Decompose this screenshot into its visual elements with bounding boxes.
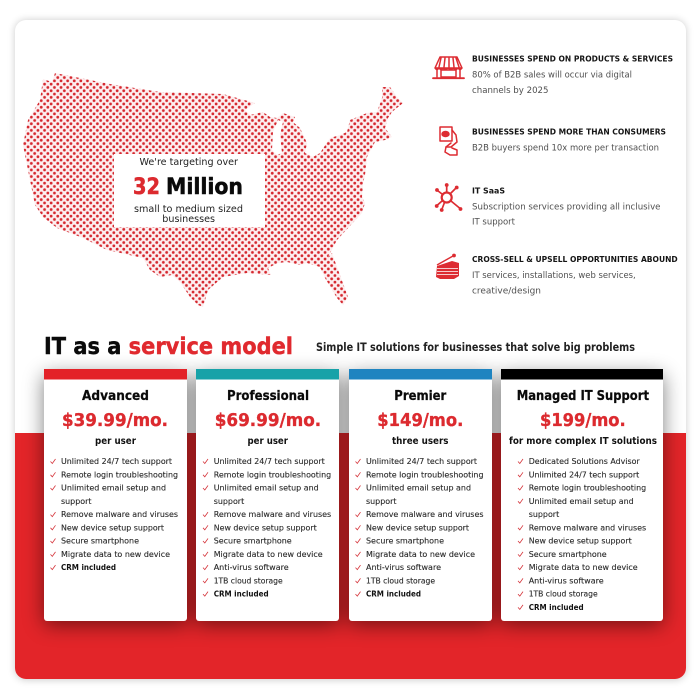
feature list: Unlimited email setup and: [214, 484, 319, 492]
feature list: Unlimited 24/7 tech support: [214, 457, 325, 466]
feature list: CRM included: [529, 603, 584, 612]
feature list: CRM included: [214, 590, 269, 599]
feature list: support: [214, 497, 244, 506]
plan price: $199/mo.: [540, 410, 626, 431]
map callout: small to medium sized: [134, 204, 243, 215]
plan unit: three users: [392, 436, 449, 447]
icon: network hub: [435, 183, 462, 212]
text: cross-sell and upsell: CROSS-SELL & UPSELL OPPORTUNITIES ABOUND: [472, 255, 678, 264]
panel: Advanced plan: [44, 369, 187, 621]
text: products and services: BUSINESSES SPEND ON PRODUCTS & SERVICES: [472, 55, 673, 64]
text: spend more than consumers: B2B buyers spend 10x more per transaction: [472, 144, 659, 154]
feature list: CRM included: [366, 590, 421, 599]
plan name: Professional: [227, 389, 309, 404]
feature list: 1TB cloud storage: [366, 576, 435, 585]
text: cross-sell and upsell: creative/design: [472, 286, 541, 296]
text: products and services: channels by 2025: [472, 86, 548, 96]
feature list: Migrate data to new device: [366, 550, 475, 559]
icon: storefront: [433, 57, 464, 78]
feature list: Remove malware and viruses: [214, 510, 331, 519]
feature list: Remove malware and viruses: [61, 510, 178, 519]
feature list: Dedicated Solutions Advisor: [529, 457, 640, 466]
feature list: [50, 457, 178, 572]
feature list: Anti-virus software: [529, 576, 604, 585]
feature list: support: [529, 510, 559, 519]
feature list: Remote login troubleshooting: [61, 470, 178, 479]
feature list: Secure smartphone: [529, 550, 607, 559]
feature list: Remote login troubleshooting: [529, 484, 646, 492]
map callout: businesses: [162, 214, 215, 225]
text: IT SaaS: IT support: [472, 218, 516, 228]
feature list: Unlimited email setup and: [529, 497, 634, 506]
lake michigan: [272, 120, 283, 155]
feature list: Secure smartphone: [214, 537, 292, 546]
feature list: Remove malware and viruses: [529, 523, 646, 532]
map callout: 32: [133, 175, 160, 200]
subheading: Simple IT solutions for businesses that solve big problems: [316, 340, 635, 354]
text: cross-sell and upsell: IT services, installations, web services,: [472, 271, 636, 281]
plan unit: per user: [95, 436, 136, 447]
text: spend more than consumers: [472, 128, 666, 154]
map callout: [114, 154, 265, 227]
feature list: [356, 457, 484, 599]
text: products and services: 80% of B2B sales will occur via digital: [472, 71, 632, 81]
feature list: 1TB cloud storage: [214, 576, 283, 585]
feature list: New device setup support: [61, 523, 164, 532]
plan unit: per user: [248, 436, 288, 447]
plan name: Managed IT Support: [517, 389, 649, 404]
map callout: We're targeting over: [140, 157, 238, 168]
text: IT SaaS: [472, 186, 660, 228]
feature list: Unlimited email setup and: [366, 484, 471, 492]
feature list: Migrate data to new device: [214, 550, 323, 559]
panel: Professional plan: [196, 369, 339, 621]
feature list: Remove malware and viruses: [366, 510, 484, 519]
feature list: Unlimited 24/7 tech support: [61, 457, 172, 466]
feature list: support: [366, 497, 396, 506]
feature list: [518, 457, 646, 612]
feature list: Remote login troubleshooting: [214, 470, 331, 479]
plan price: $149/mo.: [377, 410, 463, 431]
feature list: Secure smartphone: [61, 537, 139, 546]
panel: Premier plan: [349, 369, 492, 621]
feature list: Unlimited email setup and: [61, 484, 166, 492]
feature list: Migrate data to new device: [529, 563, 638, 572]
feature list: support: [61, 497, 92, 506]
plan price: $39.99/mo.: [62, 410, 168, 431]
feature list: New device setup support: [366, 523, 469, 532]
feature list: New device setup support: [529, 537, 632, 546]
plan price: $69.99/mo.: [215, 410, 321, 431]
heading: IT as a service model: IT as a service model: [44, 332, 293, 360]
text: products and services: [472, 55, 673, 96]
plan unit: for more complex IT solutions: [509, 436, 657, 447]
feature list: [203, 457, 331, 599]
feature list: Unlimited 24/7 tech support: [366, 457, 477, 466]
feature list: Secure smartphone: [366, 537, 444, 546]
feature list: CRM included: [61, 563, 116, 572]
feature list: Anti-virus software: [214, 563, 289, 572]
dotted US map: [23, 73, 403, 307]
icon: money stack: [436, 254, 459, 279]
feature list: Anti-virus software: [366, 563, 441, 572]
map callout: Million: [166, 175, 243, 200]
feature list: New device setup support: [214, 523, 317, 532]
text: spend more than consumers: BUSINESSES SPEND MORE THAN CONSUMERS: [472, 128, 666, 137]
text: IT SaaS: Subscription services providing all inclusive: [472, 202, 660, 212]
feature list: Migrate data to new device: [61, 550, 170, 559]
text: cross-sell and upsell: [472, 255, 678, 296]
panel: Managed IT Support plan: [501, 369, 663, 621]
icon: hand holding document: [440, 127, 457, 155]
text: IT SaaS: IT SaaS: [472, 186, 505, 195]
feature list: Unlimited 24/7 tech support: [529, 470, 639, 479]
feature list: Remote login troubleshooting: [366, 470, 484, 479]
plan name: Premier: [394, 389, 447, 404]
feature list: 1TB cloud storage: [529, 590, 598, 599]
plan name: Advanced: [82, 389, 149, 404]
